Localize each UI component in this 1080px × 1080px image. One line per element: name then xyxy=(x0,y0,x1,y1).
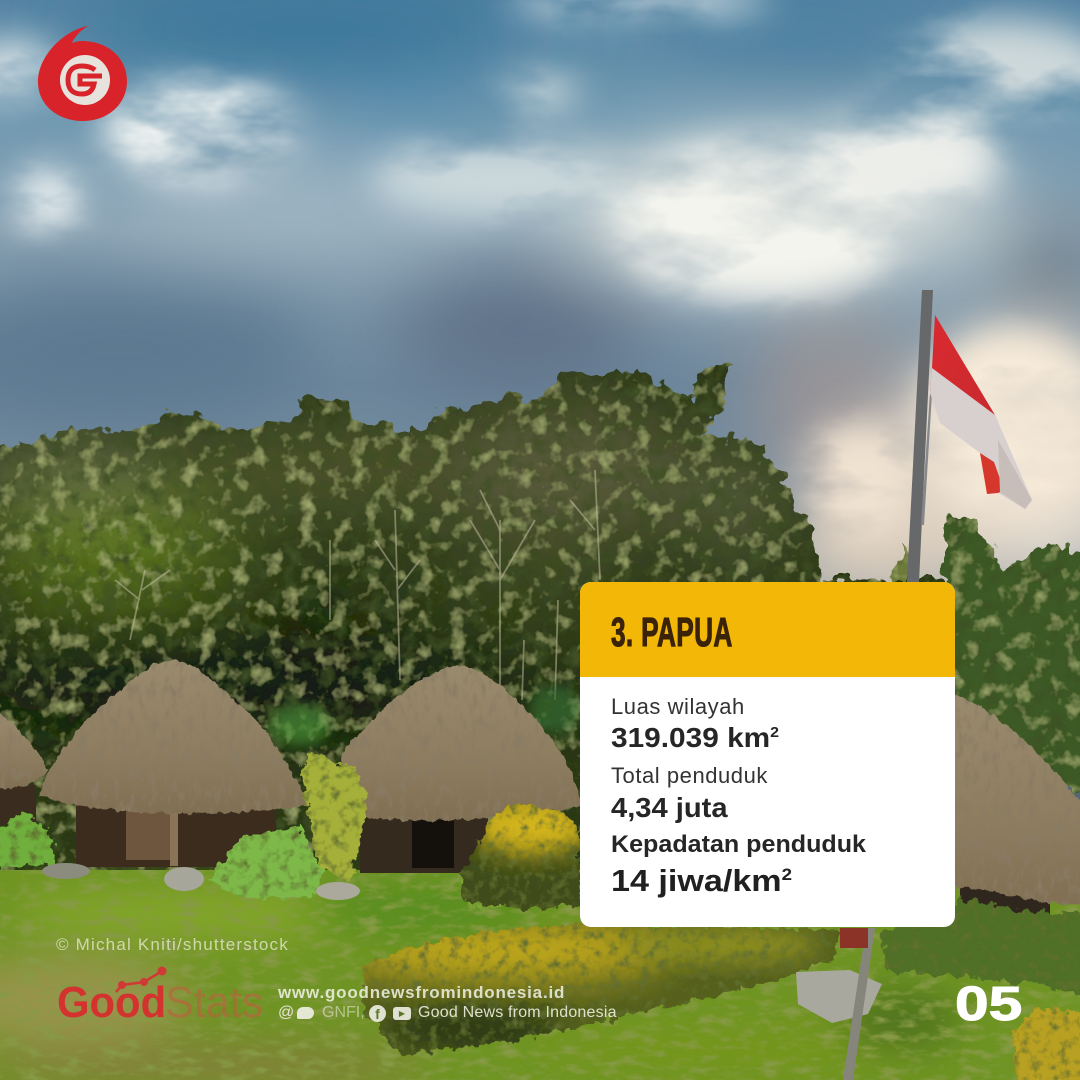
value: total penduduk: 4,34 juta xyxy=(611,792,728,823)
sky xyxy=(0,0,1080,640)
red box behind card xyxy=(840,928,868,948)
hut right xyxy=(950,692,1080,943)
card title: 3. PAPUA xyxy=(611,609,733,655)
flag of Indonesia xyxy=(930,315,1032,509)
GoodStats logo xyxy=(57,966,263,1027)
shrubs and plants xyxy=(0,752,1080,1080)
bare pale tree trunks xyxy=(115,470,600,700)
flag pole xyxy=(907,290,933,582)
handle: @ xyxy=(278,1004,294,1021)
hut far left xyxy=(0,706,49,825)
foreground grass lawn xyxy=(0,870,1080,1080)
hut left xyxy=(40,660,307,867)
info card xyxy=(580,582,955,927)
lower flag pole segment xyxy=(843,928,875,1080)
value: kepadatan penduduk: 14 jiwa/km2 xyxy=(611,863,792,898)
photo credit: © Michal Kniti/shutterstock xyxy=(56,935,289,954)
page number: 05 xyxy=(955,978,1022,1031)
label: luas wilayah: Luas wilayah xyxy=(611,694,745,719)
label: total penduduk: Total penduduk xyxy=(611,763,768,788)
forested hill and trees xyxy=(0,362,945,870)
icon: twitter xyxy=(297,1007,314,1019)
icon: facebook xyxy=(369,1005,386,1022)
trees right of card xyxy=(895,518,1080,800)
icon: youtube: ▶ xyxy=(399,1009,405,1018)
logo chart line xyxy=(115,966,166,993)
icon: youtube xyxy=(393,1007,411,1020)
stones xyxy=(42,863,882,1023)
icon: facebook: f xyxy=(375,1006,380,1022)
hut center xyxy=(340,665,582,873)
value: luas wilayah: 319.039 km2 xyxy=(611,722,779,753)
label: kepadatan penduduk: Kepadatan penduduk xyxy=(611,831,866,858)
handle text: GNFI, xyxy=(322,1004,365,1021)
social handles xyxy=(278,1004,617,1022)
logo wordmark light part: Stats xyxy=(165,978,263,1027)
website url: www.goodnewsfromindonesia.id xyxy=(278,983,565,1002)
green undergrowth behind huts xyxy=(270,686,581,745)
card header band xyxy=(580,582,955,677)
logo wordmark: Good xyxy=(57,978,166,1027)
channel name: Good News from Indonesia xyxy=(418,1004,617,1021)
